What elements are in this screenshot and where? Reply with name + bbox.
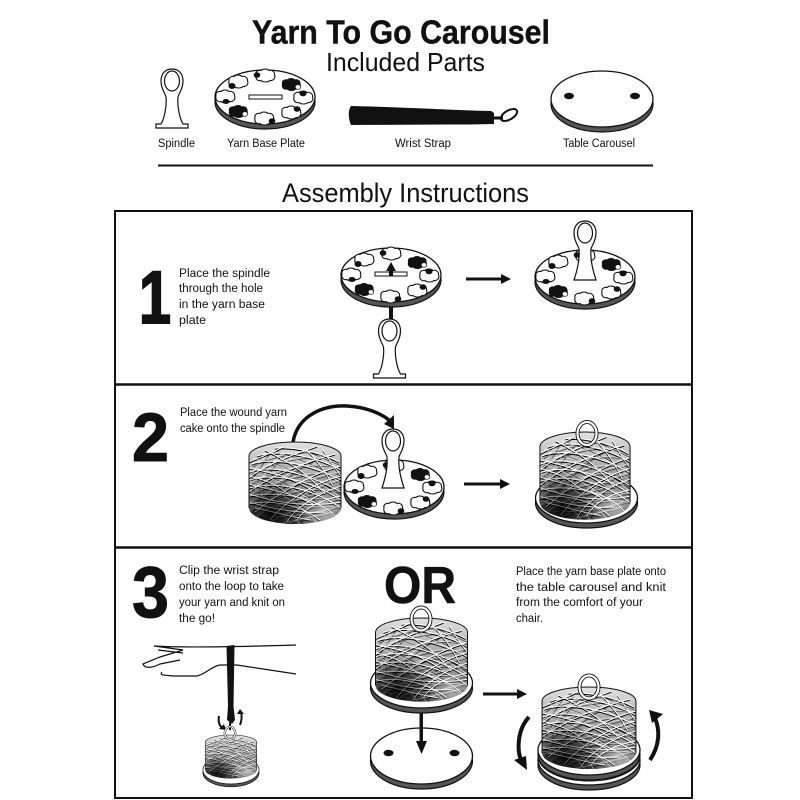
yarn on plate	[370, 608, 472, 713]
arrow	[464, 479, 510, 489]
heading: assembly instructions: Assembly Instructions	[282, 178, 529, 208]
rotation arrow right	[649, 710, 663, 760]
step 2 text: cake onto the spindle	[180, 423, 285, 435]
curved arrow	[293, 406, 394, 442]
arrow	[466, 274, 511, 284]
step 1 text: plate	[179, 315, 206, 327]
part: spindle	[156, 69, 195, 150]
panel: step 1	[139, 221, 635, 378]
spindle below plate	[374, 319, 406, 378]
step 3 left text	[179, 565, 285, 625]
part: yarn base plate: Yarn Base Plate	[227, 138, 305, 150]
part: table carousel: Table Carousel	[563, 138, 635, 150]
or label: OR	[384, 557, 456, 615]
assembled table carousel	[538, 676, 640, 790]
subtitle: included parts: Included Parts	[326, 47, 485, 77]
rotation arrow left	[514, 717, 529, 770]
instructions frame	[115, 211, 692, 798]
assembled yarn on plate	[536, 422, 638, 528]
step 3 right text: Place the yarn base plate onto	[516, 566, 666, 578]
step number 3: 3	[132, 553, 169, 633]
part: wrist strap	[349, 106, 519, 150]
plate with slot and up arrow	[341, 247, 441, 320]
step 1 text	[179, 268, 270, 327]
step 3 left text: Clip the wrist strap	[179, 565, 279, 577]
step 3 right text: the table carousel and knit	[516, 582, 667, 594]
step 2 text: Place the wound yarn	[180, 407, 287, 419]
step 2 text	[180, 407, 287, 435]
step 3 right text	[516, 566, 667, 625]
part: wrist strap: Wrist Strap	[395, 138, 451, 150]
part: table carousel	[551, 71, 653, 150]
plate with spindle	[344, 429, 444, 519]
step 3 right text: chair.	[516, 613, 543, 625]
part: yarn base plate	[215, 69, 315, 150]
step 1 text: through the hole	[179, 283, 263, 295]
panel: step 3	[132, 553, 667, 790]
step number 2: 2	[132, 399, 169, 476]
step 1 text: in the yarn base	[179, 299, 265, 311]
arm outline	[143, 645, 296, 676]
step 3 left text: the go!	[179, 613, 215, 625]
title: Yarn To Go Carousel	[252, 14, 550, 50]
table carousel	[370, 728, 472, 789]
right arrow	[483, 689, 527, 699]
plate with spindle inserted	[535, 221, 635, 309]
step 3 right text: from the comfort of your	[516, 597, 643, 609]
step 3 left text: your yarn and knit on	[179, 597, 285, 609]
panel: step 2	[132, 399, 638, 528]
small rotation arrows	[219, 709, 244, 730]
small yarn carousel	[203, 727, 259, 787]
step 1 text: Place the spindle	[179, 268, 270, 280]
step number 1: 1	[139, 256, 171, 339]
yarn cake	[247, 442, 343, 527]
part: spindle: Spindle	[158, 138, 195, 150]
down arrow	[416, 713, 427, 754]
step 3 left text: onto the loop to take	[179, 581, 284, 593]
wrist strap hanging	[226, 645, 235, 730]
